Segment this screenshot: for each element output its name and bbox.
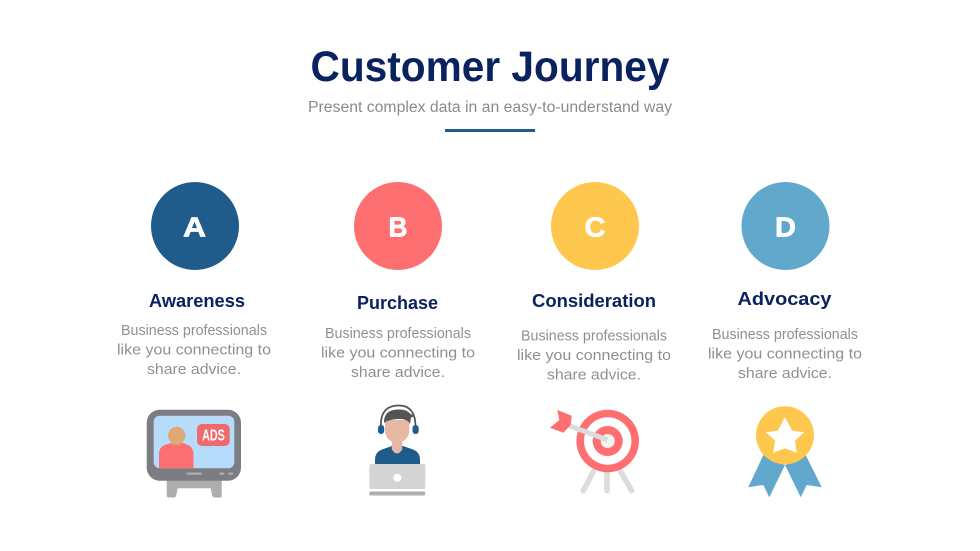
description: like you connecting to [517,348,671,364]
icon: TV with ad [147,410,241,498]
badge B: B [388,212,408,242]
heading: Purchase: Purchase [357,293,438,313]
description: Business professionals [521,328,667,344]
badge A: A [183,212,206,242]
icon: person with headset and laptop [369,405,425,496]
description: share advice. [738,366,832,382]
badge A [151,182,239,270]
description: share advice. [147,362,241,378]
description: share advice. [351,365,445,381]
description: like you connecting to [117,342,271,358]
badge C: C [584,212,606,242]
icon: target with arrow [550,410,639,491]
description: share advice. [547,368,641,384]
panel: advocacy [708,182,862,497]
badge D: D [775,212,796,242]
description: Business professionals [325,326,471,342]
subtitle: Present complex data in an easy-to-understand way [308,99,672,116]
title: Customer Journey [310,43,670,91]
badge C [551,182,639,270]
description: Business professionals [712,327,858,343]
header [308,43,672,132]
icon: award ribbon [748,406,822,497]
heading: Advocacy: Advocacy [738,289,832,309]
panel: consideration [517,182,671,491]
heading: Consideration: Consideration [532,291,656,311]
title underline [445,129,535,132]
description: Business professionals [121,323,267,339]
description: like you connecting to [708,346,862,362]
description: like you connecting to [321,346,475,362]
icon: TV with ad: ADS [202,428,225,445]
heading: Awareness: Awareness [149,291,245,311]
panel: purchase [321,182,475,496]
badge B [354,182,442,270]
badge D [742,182,830,270]
panel: awareness [117,182,271,498]
